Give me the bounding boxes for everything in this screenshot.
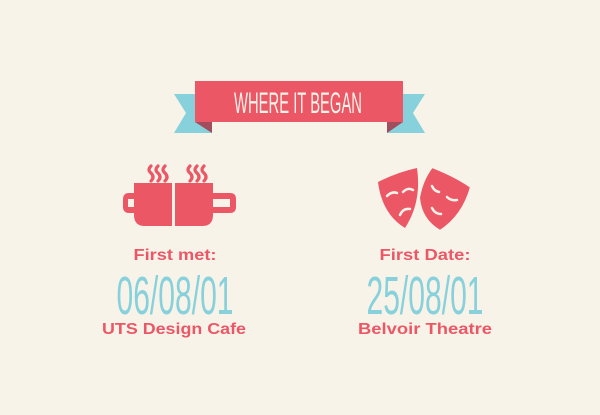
- banner: where it began: WHERE IT BEGAN: [234, 87, 362, 120]
- text block: first met: 06/08/01: [116, 266, 234, 326]
- icon: theatre masks: [378, 167, 471, 231]
- text block: first date: [358, 247, 492, 338]
- icon: coffee cups: [123, 166, 236, 226]
- text block: first met: UTS Design Cafe: [102, 321, 246, 338]
- text block: first date: Belvoir Theatre: [358, 321, 492, 338]
- text block: first met: [102, 247, 246, 338]
- text block: first met: First met:: [134, 247, 216, 264]
- text block: first date: 25/08/01: [366, 266, 484, 326]
- text block: first date: First Date:: [380, 247, 470, 264]
- banner: where it began: [174, 81, 425, 133]
